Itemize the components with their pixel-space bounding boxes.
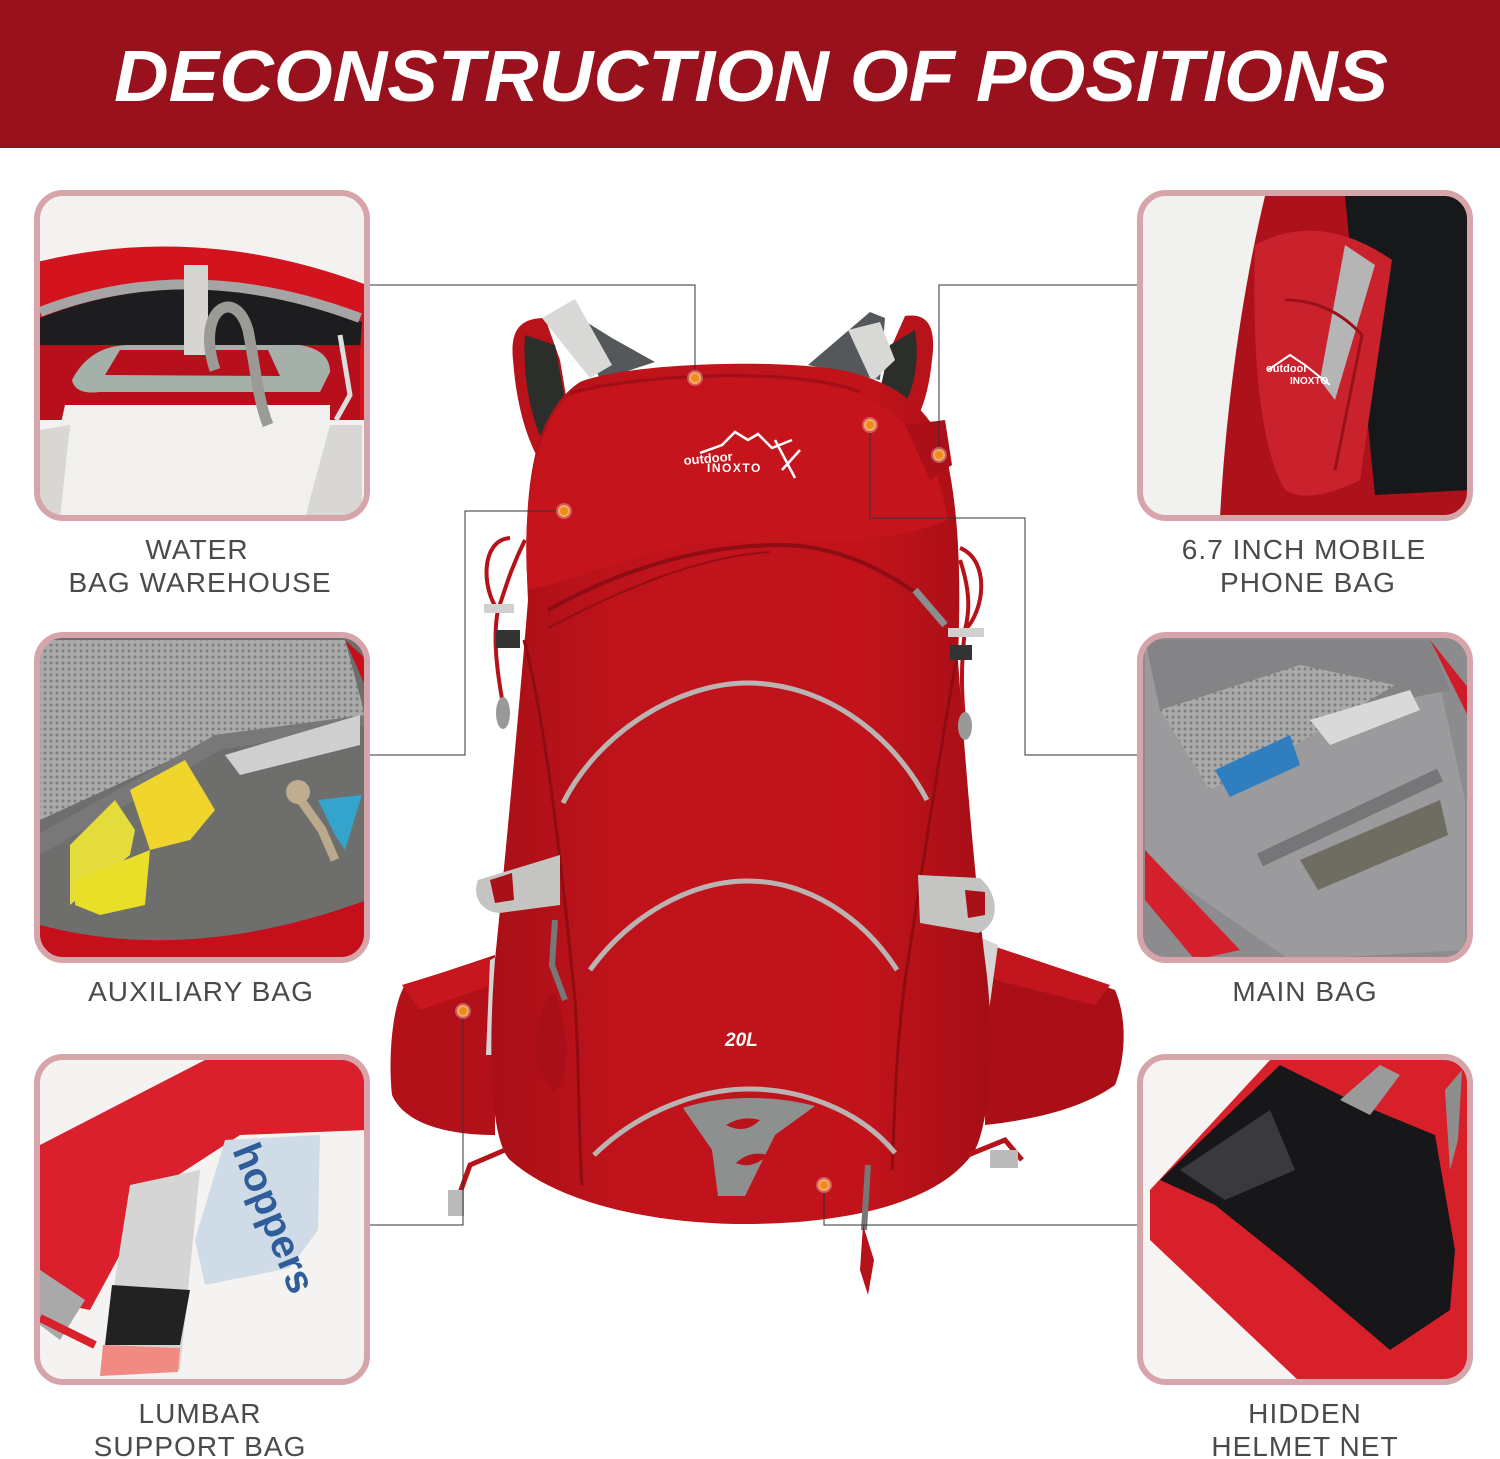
- zip pulls: [915, 590, 945, 625]
- panel: main bag: [1140, 635, 1470, 960]
- top flap: [526, 379, 948, 590]
- logo: outdoor: [683, 449, 733, 468]
- label: water bag warehouse: WATER: [145, 534, 249, 565]
- panel: lumbar support bag: [37, 1057, 367, 1382]
- waist belt right: [985, 945, 1124, 1125]
- panel: lumbar support bag: hoppers: [224, 1137, 324, 1300]
- panel: mobile phone bag: outdoor: [1266, 363, 1308, 375]
- title banner: [0, 0, 1500, 148]
- right side buckle: [918, 875, 995, 933]
- phone pouch edge: [905, 420, 952, 480]
- logo: [683, 432, 800, 478]
- bottom zip tab: [864, 1165, 868, 1230]
- leader lines: [362, 285, 1142, 1225]
- left side buckle: [476, 855, 560, 913]
- panel: water bag warehouse: [37, 193, 367, 518]
- panel: auxiliary bag: [37, 635, 367, 960]
- logo: INOXTO: [707, 461, 762, 475]
- label: mobile phone bag: 6.7 INCH MOBILE: [1182, 534, 1426, 565]
- callout dots: [457, 372, 945, 1191]
- label: mobile phone bag: PHONE BAG: [1220, 567, 1396, 598]
- lower straps: [452, 1150, 505, 1215]
- reflective arcs: [563, 683, 927, 803]
- main body: [491, 364, 991, 1224]
- label: water bag warehouse: BAG WAREHOUSE: [68, 567, 332, 598]
- shoulder straps: [512, 318, 570, 470]
- label: hidden helmet net: HIDDEN: [1248, 1398, 1362, 1429]
- panel: mobile phone bag: INOXTO: [1290, 376, 1328, 387]
- panel: hidden helmet net: [1140, 1057, 1470, 1382]
- drawcords: [487, 538, 525, 720]
- backpack illustration: [391, 299, 1124, 1295]
- panel: mobile phone bag: [1140, 193, 1470, 518]
- capacity mark: 20L: [724, 1030, 758, 1051]
- bottom grey patch: [683, 1098, 815, 1196]
- waist belt left: [391, 955, 495, 1135]
- title: DECONSTRUCTION OF POSITIONS: [114, 37, 1388, 117]
- side seams: [524, 640, 582, 1185]
- label: lumbar support bag: LUMBAR: [138, 1398, 262, 1429]
- label: auxiliary bag: AUXILIARY BAG: [88, 976, 314, 1007]
- label: main bag: MAIN BAG: [1232, 976, 1378, 1007]
